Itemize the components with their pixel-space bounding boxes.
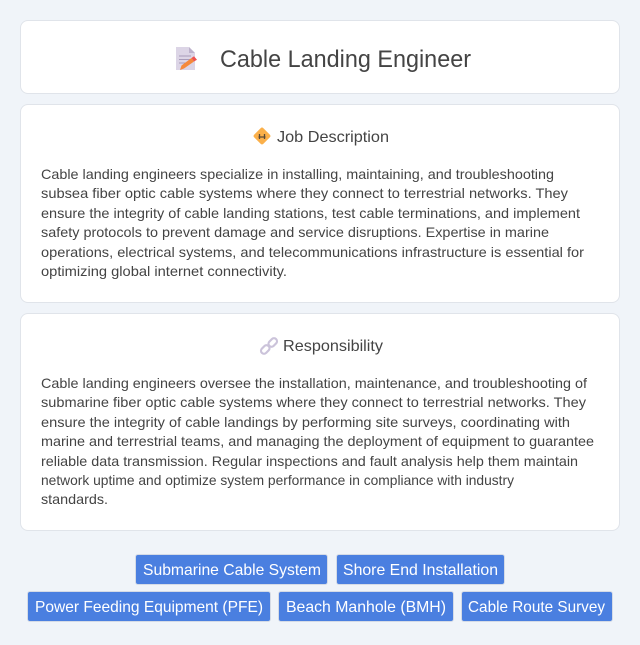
tag labels: Power Feeding Equipment (PFE): [35, 599, 263, 616]
tag labels: Beach Manhole (BMH): [286, 599, 446, 616]
title: Cable Landing Engineer: [220, 46, 471, 73]
heading: Responsibility: Responsibility: [283, 338, 383, 355]
text block: responsibility: marine and terrestrial teams, and managing the deployment of equipment to guarantee: [41, 433, 594, 449]
tag: Shore End Installation: [336, 554, 505, 585]
text block: job description: operations, electrical systems, and telecommunications infrastructure is essential for: [41, 244, 584, 260]
panel: responsibility: [20, 313, 620, 531]
text block: responsibility: [41, 375, 594, 507]
text block: responsibility: reliable data transmission. Regular inspections and fault analysis help them maintain: [41, 453, 578, 469]
text block: responsibility: ensure the integrity of cable landings by performing site surveys, coordinating with: [41, 414, 570, 430]
tag labels: Cable Route Survey: [468, 599, 605, 616]
tag: Beach Manhole (BMH): [278, 591, 454, 622]
text block: job description: [41, 166, 584, 279]
tag labels: Shore End Installation: [343, 562, 498, 579]
text block: responsibility: Cable landing engineers oversee the installation, maintenance, and troubleshooting of: [41, 375, 587, 391]
text block: responsibility: submarine fiber optic cable systems where they connect to terrestrial networks. They: [41, 394, 586, 410]
heading: Job Description: Job Description: [277, 129, 389, 146]
tag: Cable Route Survey: [461, 591, 613, 622]
text block: job description: safety protocols to prevent damage and service disruptions. Expertise in marine: [41, 224, 549, 240]
tag labels: Submarine Cable System: [143, 562, 321, 579]
text block: job description: ensure the integrity of cable landing stations, test cable terminations, and implement: [41, 205, 580, 221]
text block: job description: optimizing global internet connectivity.: [41, 263, 287, 279]
text block: responsibility: network uptime and optimize system performance in compliance with industry: [41, 472, 514, 488]
text block: responsibility: standards.: [41, 491, 108, 507]
icon: memo with pencil: [176, 47, 197, 70]
tag: Power Feeding Equipment (PFE): [27, 591, 271, 622]
text block: job description: subsea fiber optic cable systems where they connect to terrestrial networks. They: [41, 185, 568, 201]
icon: chain link: [260, 337, 278, 355]
tag: Submarine Cable System: [135, 554, 328, 585]
icon: construction diamond: [253, 127, 271, 145]
text block: job description: Cable landing engineers specialize in installing, maintaining, and troubleshooting: [41, 166, 554, 182]
tag labels: [35, 562, 605, 616]
panel: title card: [20, 20, 620, 94]
panel: job description: [20, 104, 620, 303]
